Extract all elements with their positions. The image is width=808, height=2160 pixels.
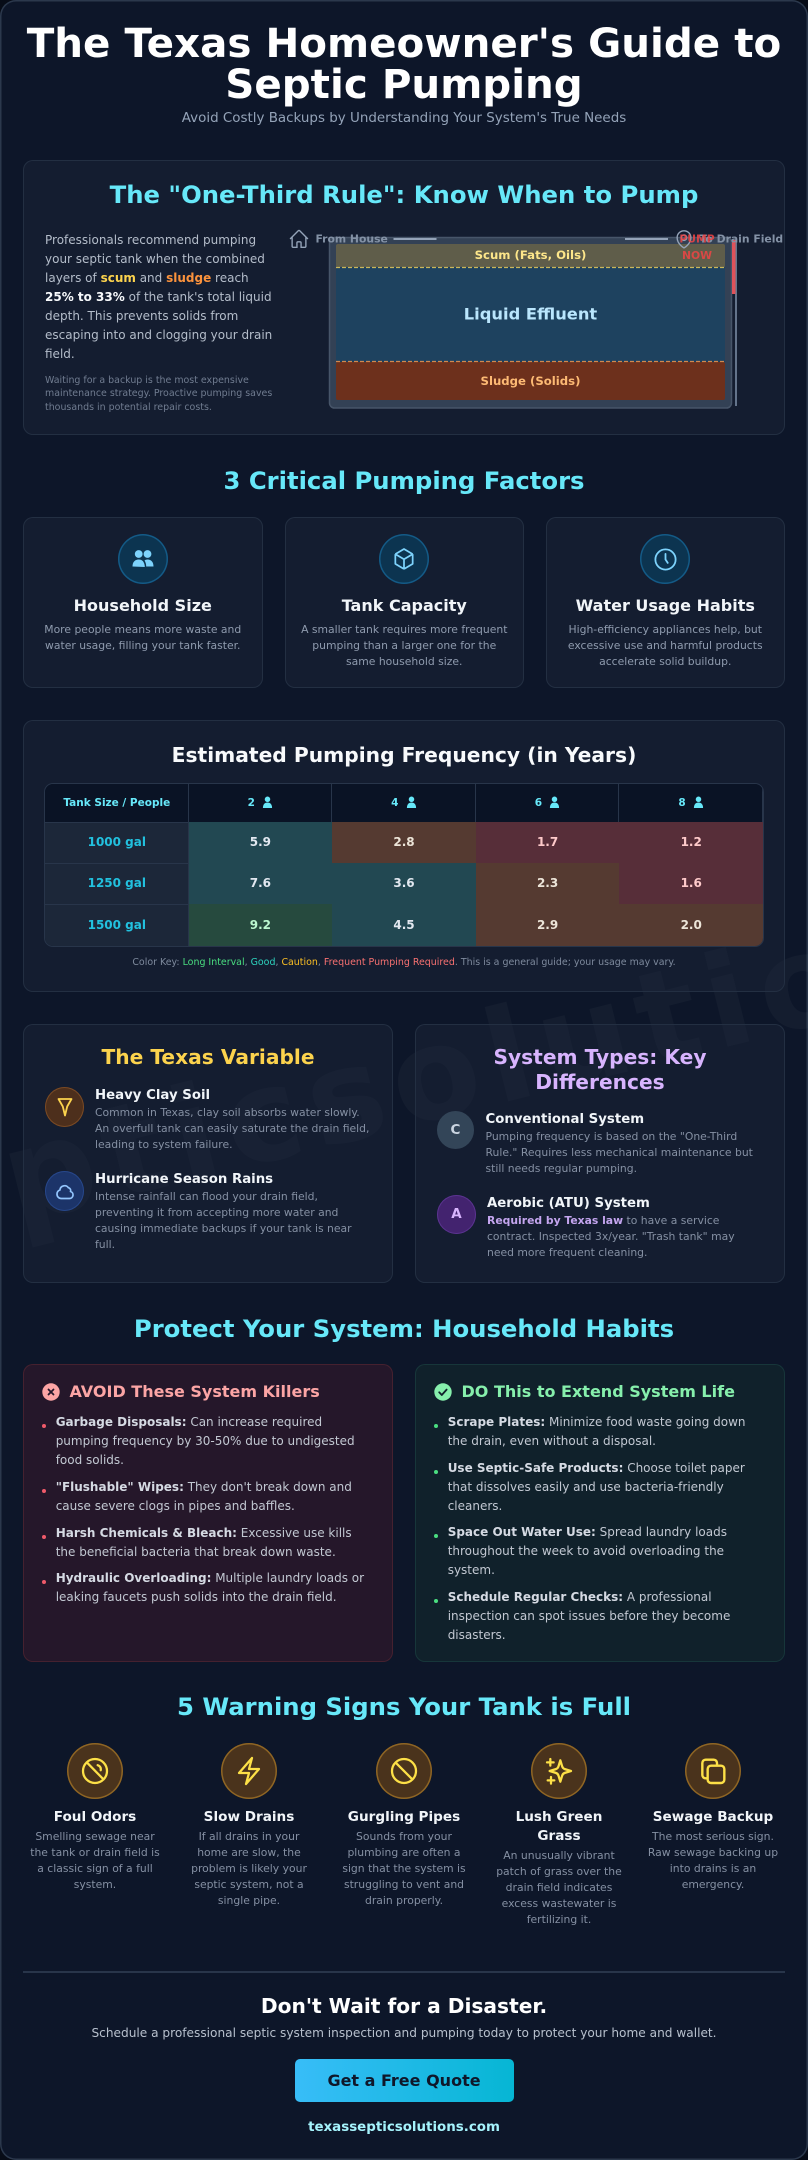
- description: [191, 1830, 307, 1907]
- heading: system types: Differences: [535, 1070, 665, 1094]
- icon: letter C: [437, 1111, 474, 1148]
- panel: system types: [415, 1024, 785, 1283]
- sludge layer: Sludge (Solids): [481, 374, 580, 388]
- icon: x circle: [42, 1383, 60, 1401]
- description: fertilizing it.: [527, 1913, 591, 1926]
- heading: Household Size: [74, 596, 212, 615]
- heading: Water Usage Habits: [576, 596, 755, 615]
- heading: household habits: Protect Your System: Household Habits: [134, 1314, 674, 1343]
- heading: Grass: [537, 1828, 581, 1844]
- button: get a free quote: Get a Free Quote: [327, 2071, 481, 2090]
- icon: letter A: [437, 1194, 476, 1234]
- list: system killers: leaking faucets push solids into the drain field.: [56, 1590, 337, 1604]
- scum layer: Scum (Fats, Oils): [475, 248, 586, 262]
- heading: [516, 1808, 602, 1844]
- panel: tank capacity: [284, 517, 524, 688]
- label: to drain field: [677, 231, 783, 248]
- list: good habits: [434, 1415, 746, 1642]
- description: An overfull tank can easily saturate the drain field,: [95, 1122, 369, 1135]
- liquid effluent layer: [336, 267, 725, 362]
- heading: Lush Green: [516, 1808, 602, 1824]
- description: contract. Inspected 3x/year. "Trash tank" may: [487, 1230, 735, 1243]
- description: accelerate solid buildup.: [599, 655, 731, 668]
- description: Common in Texas, clay soil absorbs water slowly.: [95, 1106, 360, 1119]
- list: system killers: Hydraulic Overloading: Multiple laundry loads or: [56, 1571, 364, 1585]
- description: same household size.: [346, 655, 462, 668]
- description: [301, 623, 508, 668]
- description: drain properly.: [365, 1894, 443, 1907]
- table header: Tank Size / People: [63, 796, 170, 808]
- description: Sounds from your: [356, 1830, 452, 1842]
- text block: rule explanation: field.: [45, 347, 75, 361]
- warning sign: sewage backup: [648, 1743, 778, 1891]
- description: the tank or drain field is: [30, 1846, 160, 1859]
- heading: Heavy Clay Soil: [95, 1088, 210, 1103]
- sludge layer: [336, 362, 725, 400]
- table header: 6: [535, 796, 542, 808]
- description: High-efficiency appliances help, but: [568, 623, 762, 636]
- item: aerobic system: [437, 1195, 735, 1259]
- heading: system types: System Types: Key: [493, 1045, 707, 1069]
- description: The most serious sign.: [652, 1830, 774, 1842]
- icon: letter A: A: [451, 1206, 462, 1222]
- heading: Foul Odors: [54, 1808, 136, 1824]
- description: [568, 623, 763, 668]
- panel: one-third rule: [23, 160, 785, 435]
- row: 1500 gal: 2.0: [681, 918, 702, 932]
- text block: rule explanation: Professionals recommend pumping: [45, 233, 256, 247]
- list: good habits: the drain, even without a disposal.: [448, 1434, 656, 1448]
- heading: pumping frequency: Estimated Pumping Frequency (in Years): [172, 742, 636, 766]
- list: system killers: pumping frequency by 30-50% due to undigested: [56, 1434, 355, 1448]
- heading: Aerobic (ATU) System: [487, 1196, 650, 1210]
- text block: rule explanation: depth. This prevents solids from: [45, 309, 238, 323]
- list: good habits: Use Septic-Safe Products: Choose toilet paper: [448, 1461, 745, 1475]
- row: 1250 gal: 1.6: [681, 876, 702, 890]
- row: 1500 gal: 9.2: [250, 918, 271, 932]
- heading: Slow Drains: [204, 1808, 294, 1824]
- item: hurricane season rains: [45, 1171, 352, 1251]
- description: emergency.: [682, 1878, 744, 1891]
- description: More people means more waste and: [44, 623, 241, 636]
- description: preventing it from accepting more water and: [95, 1206, 338, 1219]
- description: drain field indicates: [506, 1881, 612, 1894]
- description: excessive use and harmful products: [568, 639, 763, 652]
- row: 1000 gal: 5.9: [250, 835, 271, 849]
- icon: people: [118, 534, 168, 584]
- heading: avoid: AVOID These System Killers: [70, 1382, 320, 1401]
- list: good habits: inspection can spot issues before they become: [448, 1609, 730, 1623]
- text block: rule explanation: 25% to 33% of the tank's total liquid: [45, 290, 272, 304]
- icon: letter C: C: [451, 1122, 460, 1138]
- description: Pumping frequency is based on the "One-Third: [486, 1130, 737, 1143]
- website link: texassepticsolutions.com: [308, 2120, 500, 2135]
- description: leading to system failure.: [95, 1138, 233, 1151]
- list: good habits: that dissolves easily and use bacteria-friendly: [448, 1480, 724, 1494]
- icon: clock: [640, 534, 690, 584]
- list: good habits: throughout the week to avoid overloading the: [448, 1544, 724, 1558]
- list: good habits: Schedule Regular Checks: A professional: [448, 1590, 712, 1604]
- panel: household size: [23, 517, 262, 688]
- description: causing immediate backups if your tank is near: [95, 1222, 352, 1235]
- heading: Tank Capacity: [342, 596, 467, 615]
- description: into drains is an: [670, 1862, 756, 1875]
- warning sign: slow drains: [191, 1743, 307, 1907]
- table header: 2: [248, 796, 255, 808]
- row: 1250 gal: 2.3: [537, 876, 558, 890]
- list: good habits: cleaners.: [448, 1499, 502, 1513]
- icon: check circle: [434, 1383, 452, 1401]
- list: good habits: system.: [448, 1563, 495, 1577]
- item: heavy clay soil: [45, 1087, 369, 1151]
- diagram: septic tank cross section: [290, 230, 783, 409]
- inlet pipe: [394, 238, 436, 240]
- level gauge: [732, 240, 737, 406]
- icon: funnel: [45, 1087, 84, 1127]
- description: [486, 1130, 753, 1175]
- description: If all drains in your: [199, 1830, 299, 1842]
- description: [496, 1848, 622, 1926]
- label: to drain field: To Drain Field: [700, 232, 783, 246]
- scum layer: [336, 244, 725, 268]
- row: 1000 gal: 1.7: [537, 835, 558, 849]
- button: get a free quote: [294, 2059, 514, 2102]
- warning sign: foul odors: [30, 1743, 160, 1891]
- text block: rule explanation: your septic tank when the combined: [45, 252, 265, 266]
- list: system killers: Garbage Disposals: Can increase required: [56, 1415, 322, 1429]
- row: 1500 gal: 2.9: [537, 918, 558, 932]
- panel: do list: [415, 1364, 785, 1662]
- description: [95, 1190, 352, 1251]
- panel: avoid list: [23, 1364, 393, 1662]
- description: water usage, filling your tank faster.: [45, 639, 240, 652]
- text block: backup warning: Waiting for a backup is the most expensive: [45, 374, 249, 386]
- label: from house: [290, 230, 388, 247]
- description: An unusually vibrant: [503, 1848, 615, 1862]
- panel: water usage habits: [546, 517, 785, 688]
- callout: pump now: PUMP: [679, 232, 715, 246]
- list: system killers: Harsh Chemicals & Bleach: Excessive use kills: [56, 1526, 352, 1540]
- text block: rule explanation: escaping into and clogging your drain: [45, 328, 272, 342]
- description: sign that the system is: [342, 1862, 466, 1875]
- description: [30, 1830, 160, 1891]
- row: 1250 gal: 3.6: [393, 876, 415, 890]
- description: [95, 1106, 369, 1151]
- table header: [45, 784, 763, 822]
- row: 1000 gal: 1000 gal: [88, 835, 146, 849]
- icon: no symbol: [376, 1743, 432, 1799]
- icon: bolt: [221, 1743, 277, 1799]
- description: home are slow, the: [197, 1846, 301, 1859]
- call to action heading: Don't Wait for a Disaster.: [261, 1994, 547, 2018]
- list: system killers: "Flushable" Wipes: They don't break down and: [56, 1480, 352, 1494]
- description: still needs regular pumping.: [486, 1162, 637, 1175]
- row: 1250 gal: [45, 863, 763, 904]
- list: system killers: cause severe clogs in pipes and baffles.: [56, 1499, 295, 1513]
- table header: 8: [678, 796, 686, 808]
- icon: stacked squares: [685, 1743, 741, 1799]
- row: 1500 gal: 1500 gal: [88, 918, 146, 932]
- heading: Sewage Backup: [653, 1808, 773, 1824]
- heading: Gurgling Pipes: [348, 1808, 460, 1824]
- icon: sparkles: [531, 1743, 587, 1799]
- icon: cloud: [45, 1170, 84, 1210]
- row: 1000 gal: 1.2: [681, 835, 702, 849]
- tank shell: [330, 238, 732, 408]
- row: 1500 gal: [45, 904, 763, 946]
- warning sign: lush green grass: [496, 1743, 622, 1926]
- heading: Conventional System: [486, 1112, 644, 1127]
- legend: color key: Color Key: Long Interval, Good, Caution, Frequent Pumping Required. This is a general guide; your usage may vary.: [132, 957, 676, 968]
- heading: warning signs: 5 Warning Signs Your Tank is Full: [177, 1692, 631, 1721]
- description: Required by Texas law to have a service: [487, 1214, 719, 1226]
- description: [44, 623, 241, 652]
- title: The Texas Homeowner's Guide to: [27, 18, 781, 66]
- row: 1000 gal: [45, 822, 763, 863]
- description: septic system, not a: [194, 1878, 304, 1891]
- heading: do this: DO This to Extend System Life: [462, 1382, 735, 1401]
- table: frequency by tank size and people: [45, 784, 763, 946]
- heading: one-third rule: The "One-Third Rule": Know When to Pump: [110, 180, 698, 209]
- description: pumping than a larger one for the: [312, 639, 496, 652]
- list: system killers: the beneficial bacteria that break down waste.: [56, 1545, 336, 1559]
- description: system.: [74, 1878, 116, 1891]
- description: plumbing are often a: [347, 1846, 461, 1859]
- icon: cube: [379, 534, 429, 584]
- title: [26, 18, 781, 108]
- list: system killers: [42, 1415, 364, 1604]
- description: problem is likely your: [191, 1862, 307, 1875]
- description: full.: [95, 1238, 115, 1251]
- outlet pipe: [625, 238, 668, 240]
- description: need more frequent cleaning.: [487, 1246, 647, 1259]
- warning sign: gurgling pipes: [342, 1743, 466, 1907]
- list: system killers: food solids.: [56, 1453, 124, 1467]
- description: single pipe.: [218, 1894, 280, 1907]
- panel: the texas variable: [23, 1024, 393, 1283]
- description: patch of grass over the: [496, 1865, 622, 1878]
- list: good habits: Scrape Plates: Minimize food waste going down: [448, 1415, 746, 1429]
- description: Raw sewage backing up: [648, 1846, 778, 1859]
- row: 1500 gal: 4.5: [393, 918, 415, 932]
- table header: 4: [391, 796, 398, 808]
- label: from house: From House: [316, 232, 388, 246]
- text block: backup warning: maintenance strategy. Proactive pumping saves: [45, 388, 272, 399]
- title: Septic Pumping: [225, 60, 583, 108]
- heading: texas variable: The Texas Variable: [101, 1045, 315, 1069]
- heading: system types: [493, 1045, 707, 1094]
- description: [342, 1830, 466, 1907]
- heading: critical factors: 3 Critical Pumping Factors: [223, 466, 585, 495]
- callout: pump now: NOW: [682, 249, 712, 262]
- liquid effluent layer: Liquid Effluent: [464, 304, 597, 324]
- description: struggling to vent and: [344, 1878, 464, 1891]
- row: 1250 gal: 1250 gal: [88, 876, 146, 890]
- list: good habits: Space Out Water Use: Spread laundry loads: [448, 1525, 727, 1539]
- text block: backup warning: thousands in potential repair costs.: [45, 402, 212, 413]
- text block: rule explanation: layers of scum and sludge reach: [45, 271, 249, 285]
- description: Rule." Requires less mechanical maintenance but: [486, 1146, 753, 1159]
- call to action text: Schedule a professional septic system inspection and pumping today to protect your home and wallet.: [91, 2026, 717, 2040]
- description: Intense rainfall can flood your drain field,: [95, 1190, 318, 1202]
- panel: pumping frequency: [23, 720, 785, 992]
- description: [487, 1214, 735, 1259]
- text block: rule explanation: [45, 233, 272, 361]
- row: 1250 gal: 7.6: [250, 876, 271, 890]
- item: conventional system: [437, 1111, 753, 1175]
- description: Smelling sewage near: [35, 1830, 155, 1842]
- description: A smaller tank requires more frequent: [301, 623, 507, 636]
- description: excess wastewater is: [502, 1897, 616, 1910]
- heading: Hurricane Season Rains: [95, 1172, 273, 1186]
- row: 1000 gal: 2.8: [393, 835, 415, 849]
- subtitle: Avoid Costly Backups by Understanding Your System's True Needs: [182, 111, 626, 126]
- icon: blocked nose: [67, 1743, 123, 1799]
- description: a classic sign of a full: [37, 1862, 153, 1875]
- list: good habits: disasters.: [448, 1628, 506, 1642]
- text block: backup warning: [45, 374, 272, 413]
- description: [648, 1830, 778, 1891]
